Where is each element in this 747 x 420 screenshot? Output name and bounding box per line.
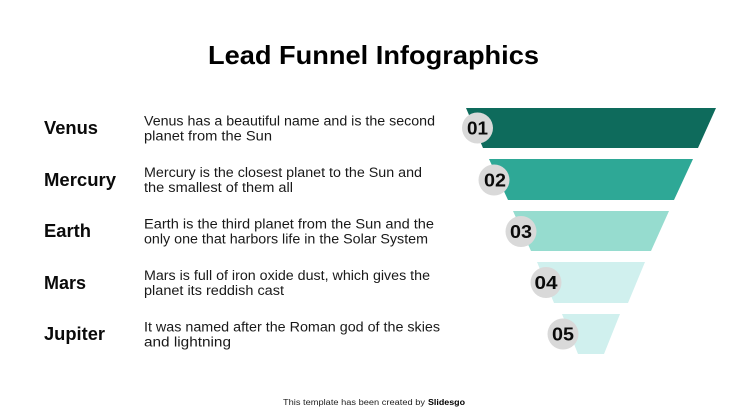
footer credit: This template has been created by (283, 398, 425, 407)
description: Mercury (144, 165, 422, 195)
badge 05 (548, 318, 578, 350)
badge 04 (530, 267, 562, 298)
name: Mars: Mars (44, 273, 86, 293)
funnel band 5 (562, 314, 620, 354)
badge 02: 02 (484, 170, 506, 190)
description: Jupiter: It was named after the Roman god of the skies (144, 320, 440, 334)
description: Earth: Earth is the third planet from the Sun and the (144, 216, 434, 232)
badge 04: 04 (534, 273, 558, 293)
row: Mercury (44, 165, 422, 195)
row: Earth (44, 216, 434, 246)
funnel band 4 (537, 262, 645, 303)
name: Mercury: Mercury (44, 170, 116, 190)
description: Mercury: the smallest of them all (144, 180, 293, 195)
description: Venus: Venus has a beautiful name and is the second (144, 114, 435, 128)
description: Venus (144, 114, 435, 144)
row: Jupiter (44, 320, 440, 350)
badge 05: 05 (552, 324, 574, 344)
footer credit: Slidesgo (428, 398, 465, 407)
badge 02 (478, 164, 510, 196)
description: Venus: planet from the Sun (144, 128, 272, 144)
description: Jupiter (144, 320, 440, 350)
badge 01: 01 (467, 118, 488, 138)
description: Mercury: Mercury is the closest planet to the Sun and (144, 165, 422, 180)
funnel band 3 (513, 211, 669, 251)
funnel band 2 (489, 159, 693, 200)
name: Earth: Earth (44, 221, 91, 241)
funnel band 1 (466, 108, 716, 148)
description: Earth (144, 216, 434, 246)
description: Mars: Mars is full of iron oxide dust, which gives the (144, 268, 430, 283)
description: Earth: only one that harbors life in the Solar System (144, 232, 428, 246)
description: Mars (144, 268, 430, 298)
row: Venus (44, 114, 435, 144)
description: Jupiter: and lightning (144, 334, 231, 350)
name: Jupiter: Jupiter (44, 324, 105, 344)
row: Mars (44, 268, 430, 298)
funnel chart (462, 108, 716, 354)
badge 03 (506, 216, 536, 247)
description: Mars: planet its reddish cast (144, 283, 284, 298)
badge 01 (462, 112, 493, 144)
footer credit (283, 398, 465, 407)
badge 03: 03 (510, 222, 532, 242)
name: Venus: Venus (44, 118, 98, 138)
title: Lead Funnel Infographics (208, 40, 539, 70)
